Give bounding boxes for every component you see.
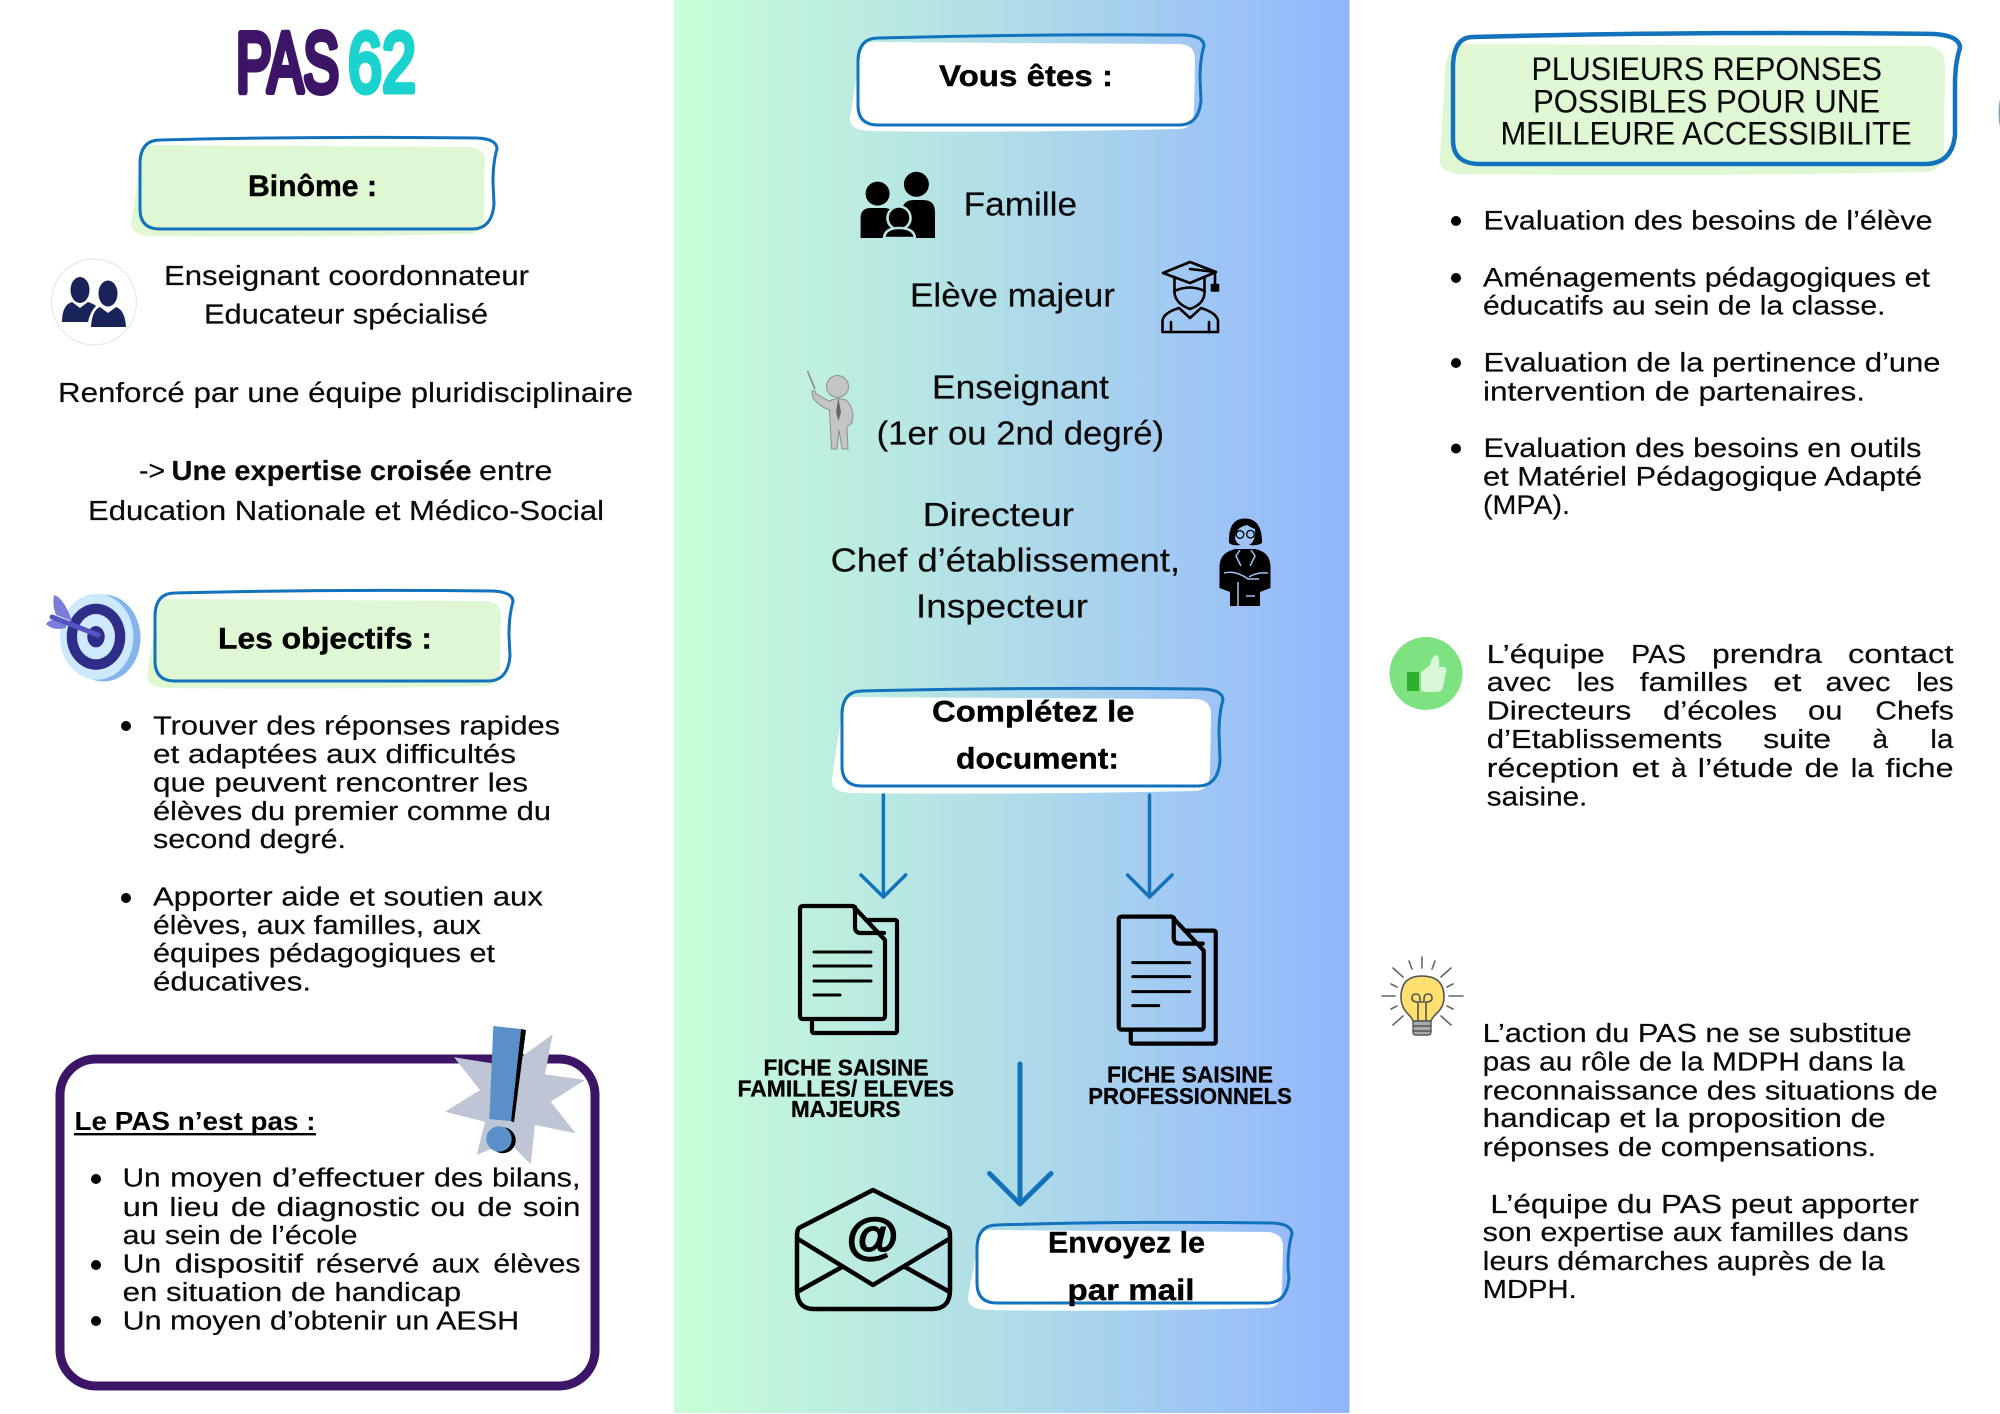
text block: prise de contact: les	[1577, 669, 1615, 697]
text block: prise de contact: d’Etablissements	[1487, 726, 1722, 754]
bullet list: ce que le PAS n'est pas: élèves	[493, 1250, 580, 1278]
icon: graduate	[1162, 262, 1218, 332]
text block: prise de contact: de	[1805, 755, 1839, 783]
bullet list: objectifs: élèves du premier comme du	[153, 798, 551, 826]
text block: prise de contact: réception	[1487, 755, 1619, 783]
text block: expertise croisée: ->	[139, 455, 165, 486]
bullet list: ce que le PAS n'est pas: Un moyen d’obtenir un AESH	[123, 1308, 519, 1336]
heading: Complétez le document	[832, 688, 1223, 794]
bullet list: réponses: Evaluation de la pertinence d’une	[1484, 348, 1940, 378]
heading: Les objectifs: Les objectifs :	[218, 622, 432, 656]
label: Elève majeur: Elève majeur	[910, 276, 1115, 314]
arrow: to fiche familles	[861, 795, 906, 897]
bullet list: ce que le PAS n'est pas: Un	[123, 1164, 161, 1192]
label: Enseignant: Enseignant	[932, 368, 1109, 406]
heading: Vous êtes: Vous êtes :	[939, 60, 1113, 93]
logo: PAS62: PAS	[236, 16, 339, 110]
label: Directeur: Inspecteur	[916, 588, 1088, 624]
label: fiche saisine familles: FAMILLES/ ELEVES	[738, 1076, 954, 1102]
bullet list: ce que le PAS n'est pas: de	[477, 1194, 512, 1222]
text block: prise de contact: la	[1851, 755, 1875, 783]
icon: exclamation mark on star burst	[445, 1026, 585, 1164]
text block: prise de contact: saisine.	[1487, 784, 1587, 812]
icon: family	[861, 172, 935, 238]
icon: envelope with at sign	[797, 1190, 950, 1309]
bullet list: ce que le PAS n'est pas: moyen	[170, 1164, 262, 1192]
bullet list: réponses: et Matériel Pédagogique Adapté	[1483, 462, 1922, 492]
bullet list: objectifs: Trouver des réponses rapides	[153, 712, 560, 740]
label: Enseignant: (1er ou 2nd degré)	[877, 414, 1164, 452]
bullet list: objectifs: que peuvent rencontrer les	[153, 770, 528, 798]
label: Directeur: Chef d’établissement,	[831, 542, 1180, 578]
heading: plusieurs réponses: PLUSIEURS REPONSES	[1532, 51, 1882, 87]
heading: Complétez le document: Complétez le	[932, 696, 1134, 728]
bullet list: réponses: (MPA).	[1483, 490, 1570, 520]
bullet list: objectifs: et adaptées aux difficultés	[153, 741, 516, 769]
text block: binôme members: Educateur spécialisé	[204, 298, 488, 330]
text block: prise de contact: familles	[1640, 669, 1748, 697]
label: fiche saisine familles: MAJEURS	[791, 1096, 900, 1122]
bullet list: réponses: Aménagements pédagogiques et	[1483, 262, 1931, 292]
text: équipe pluridisciplinaire: Renforcé par une équipe pluridisciplinaire	[58, 377, 633, 408]
text block: prise de contact: à	[1671, 755, 1688, 783]
bullet list: réponses: Evaluation des besoins en outils	[1484, 433, 1922, 463]
icon: document professionnels	[1119, 917, 1216, 1044]
bullet list: ce que le PAS n'est pas: réservé	[316, 1250, 419, 1278]
arrow: to email	[990, 1064, 1051, 1204]
bullet list: réponses: éducatifs au sein de la classe.	[1483, 290, 1886, 320]
icon: envelope with at sign: @	[846, 1208, 898, 1264]
text block: action du PAS et MDPH: reconnaissance des situations de	[1483, 1078, 1938, 1106]
logo: PAS62: 62	[348, 16, 416, 110]
text block: action du PAS et MDPH: son expertise aux familles dans	[1483, 1219, 1909, 1247]
text block: prise de contact: ou	[1808, 698, 1842, 726]
heading: Vous êtes	[850, 35, 1204, 132]
bullet list: réponses: Evaluation des besoins de l’élève	[1484, 206, 1932, 236]
text block: action du PAS et MDPH	[1483, 1020, 1938, 1304]
icon: light bulb	[1382, 957, 1463, 1035]
text block: prise de contact: suite	[1763, 726, 1831, 754]
heading: Le PAS n'est pas: Le PAS n’est pas :	[74, 1106, 316, 1136]
text block: prise de contact: L’équipe	[1487, 641, 1605, 669]
icon: thumbs up	[1390, 637, 1462, 710]
text block: expertise croisée: entre	[479, 455, 552, 486]
text block: action du PAS et MDPH: leurs démarches auprès de la	[1483, 1248, 1886, 1276]
icon: woman with glasses	[1220, 518, 1270, 606]
text block: prise de contact: avec	[1826, 669, 1891, 697]
bullet list: ce que le PAS n'est pas: au sein de l’école	[123, 1222, 358, 1250]
text block: expertise croisée	[88, 455, 604, 526]
text block: binôme members: Enseignant coordonnateur	[164, 260, 529, 291]
bullet list: ce que le PAS n'est pas: un	[123, 1194, 159, 1222]
heading: plusieurs réponses	[1440, 33, 1960, 175]
text block: prise de contact: contact	[1848, 641, 1954, 669]
text block: action du PAS et MDPH: L’équipe du PAS peut apporter	[1490, 1191, 1920, 1219]
icon: teacher with pointer	[808, 371, 853, 449]
panel: Le PAS n'est pas	[60, 1026, 595, 1386]
label: fiche saisine familles: FICHE SAISINE	[764, 1054, 928, 1080]
text block: prise de contact: Directeurs	[1487, 698, 1631, 726]
heading: Envoyez le par mail: Envoyez le	[1048, 1226, 1205, 1260]
text block: expertise croisée: Education Nationale et Médico-Social	[88, 495, 604, 526]
text block: binôme members	[164, 260, 529, 330]
bullet list: ce que le PAS n'est pas	[91, 1164, 580, 1336]
cropped shape at right edge	[1998, 72, 2000, 154]
bullet list: ce que le PAS n'est pas: Un	[123, 1250, 161, 1278]
text block: expertise croisée: Une expertise croisée	[172, 455, 472, 486]
text block: prise de contact: la	[1930, 726, 1954, 754]
text block: prise de contact: à	[1872, 726, 1889, 754]
bullet list: ce que le PAS n'est pas: ou	[430, 1194, 466, 1222]
bullet list: ce que le PAS n'est pas: soin	[523, 1194, 580, 1222]
bullet list: ce que le PAS n'est pas: des	[434, 1164, 483, 1192]
label: Directeur	[831, 496, 1180, 624]
label: Directeur: Directeur	[923, 496, 1074, 533]
label: fiche saisine professionnels	[1088, 1062, 1292, 1109]
text block: prise de contact: avec	[1487, 669, 1552, 697]
icon: target with dart	[46, 594, 140, 682]
bullet list: réponses	[1451, 206, 1940, 520]
bullet list: ce que le PAS n'est pas: dispositif	[175, 1250, 304, 1278]
heading: plusieurs réponses: MEILLEURE ACCESSIBILITE	[1500, 116, 1912, 152]
text block: prise de contact	[1487, 641, 1954, 812]
label: fiche saisine professionnels: FICHE SAISINE	[1107, 1062, 1273, 1088]
bullet list: ce que le PAS n'est pas: lieu	[169, 1194, 219, 1222]
label: fiche saisine familles	[738, 1054, 954, 1122]
bullet list: objectifs: Apporter aide et soutien aux	[153, 884, 543, 912]
heading: Binôme: Binôme :	[248, 170, 377, 203]
text block: prise de contact: fiche	[1886, 755, 1954, 783]
text block: prise de contact: l’étude	[1698, 755, 1793, 783]
text block: prise de contact: les	[1916, 669, 1954, 697]
heading: Envoyez le par mail: par mail	[1068, 1274, 1194, 1307]
bullet list: ce que le PAS n'est pas: de	[231, 1194, 266, 1222]
icon: document familles	[800, 906, 897, 1033]
bullet list: ce que le PAS n'est pas: d’effectuer	[272, 1164, 425, 1192]
bullet list: ce que le PAS n'est pas: en situation de handicap	[123, 1279, 461, 1307]
text block: action du PAS et MDPH: L’action du PAS ne se substitue	[1483, 1020, 1912, 1048]
heading: Complétez le document: document:	[956, 743, 1119, 776]
icon: two people in circle	[52, 259, 136, 345]
text block: prise de contact: PAS	[1631, 641, 1686, 669]
text block: prise de contact: et	[1632, 755, 1659, 783]
heading: Envoyez le par mail	[968, 1222, 1292, 1311]
bullet list: ce que le PAS n'est pas: bilans,	[492, 1164, 580, 1192]
text block: prise de contact: Chefs	[1875, 698, 1954, 726]
bullet list: objectifs: éducatives.	[153, 968, 311, 996]
text block: action du PAS et MDPH: réponses de compensations.	[1483, 1134, 1876, 1162]
bullet list: objectifs: équipes pédagogiques et	[153, 940, 495, 968]
text block: action du PAS et MDPH: MDPH.	[1483, 1276, 1577, 1304]
arrow: to fiche professionnels	[1128, 795, 1172, 897]
label: Enseignant	[877, 368, 1164, 452]
heading: plusieurs réponses: POSSIBLES POUR UNE	[1533, 84, 1880, 120]
bullet list: objectifs: élèves, aux familles, aux	[153, 912, 481, 940]
text block: prise de contact: d’écoles	[1663, 698, 1777, 726]
bullet list: ce que le PAS n'est pas: diagnostic	[276, 1194, 420, 1222]
heading: Les objectifs	[147, 590, 513, 689]
text block: action du PAS et MDPH: pas au rôle de la MDPH dans la	[1483, 1048, 1906, 1076]
panel: centre gradient column	[674, 0, 1350, 1413]
text block: prise de contact: prendra	[1712, 641, 1823, 669]
bullet list: ce que le PAS n'est pas: aux	[432, 1250, 480, 1278]
bullet list: objectifs: second degré.	[153, 826, 346, 854]
label: Famille: Famille	[964, 186, 1077, 222]
text block: action du PAS et MDPH: handicap et la proposition de	[1483, 1105, 1886, 1133]
heading: Binôme	[131, 137, 497, 237]
text block: prise de contact: et	[1773, 669, 1801, 697]
label: fiche saisine professionnels: PROFESSIONNELS	[1088, 1083, 1292, 1109]
bullet list: objectifs	[121, 712, 560, 996]
bullet list: réponses: intervention de partenaires.	[1483, 376, 1865, 406]
